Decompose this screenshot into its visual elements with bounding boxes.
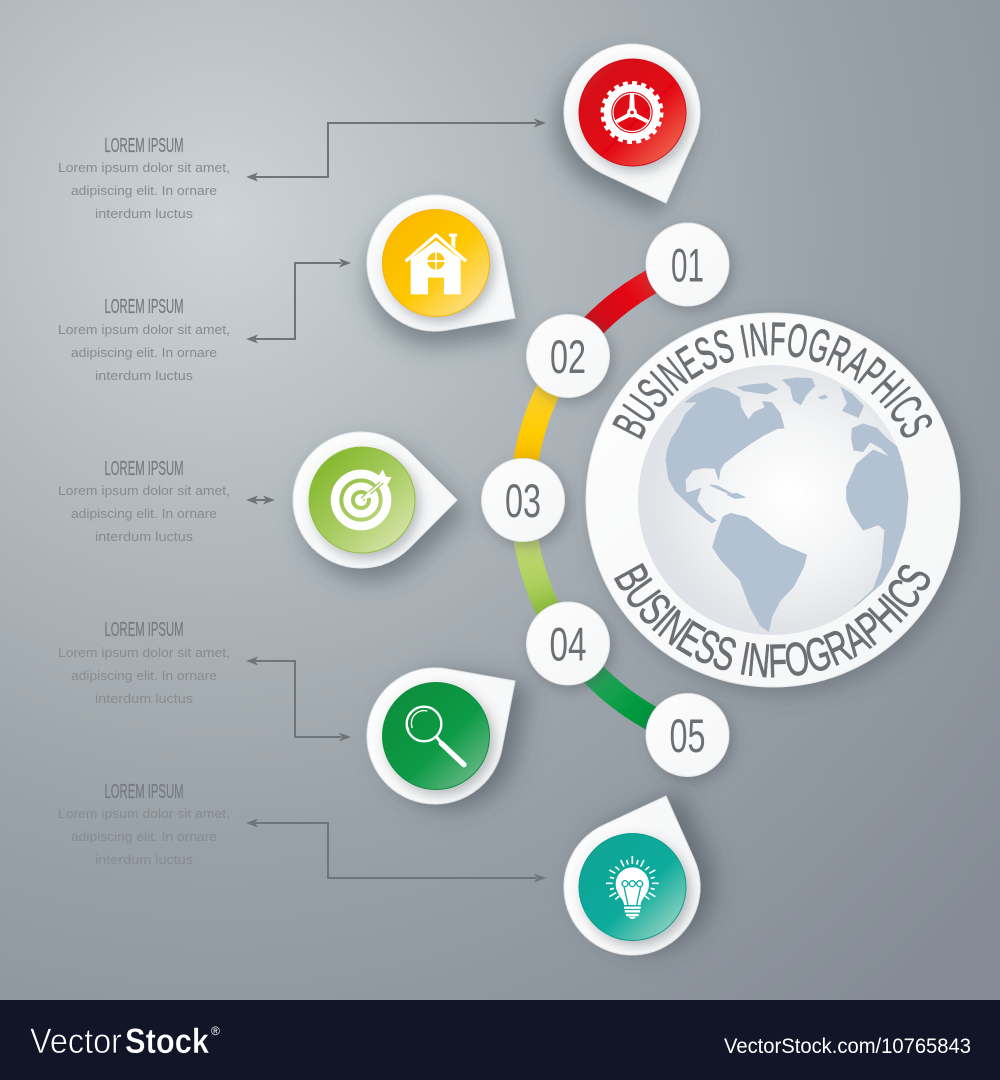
icon: magnifier bbox=[407, 707, 464, 765]
text block 1: LOREM IPSUM bbox=[104, 135, 184, 157]
number badge 03: 03 bbox=[505, 474, 541, 527]
text block 2: interdum luctus bbox=[95, 369, 193, 383]
text block 5: adipiscing elit. In ornare bbox=[71, 830, 217, 844]
text block 5 bbox=[58, 781, 230, 867]
footer logo: Stock bbox=[125, 1022, 209, 1061]
arrow 2 bbox=[246, 258, 351, 344]
outer white ring bbox=[586, 313, 960, 687]
number badge 05 bbox=[646, 694, 729, 776]
text block 1: Lorem ipsum dolor sit amet, bbox=[58, 161, 230, 175]
text block 2: Lorem ipsum dolor sit amet, bbox=[58, 323, 230, 337]
icon: house bbox=[407, 234, 465, 294]
footer logo: Vector bbox=[30, 1022, 122, 1061]
arrow 4 bbox=[246, 656, 351, 742]
text block 3: interdum luctus bbox=[95, 530, 193, 544]
number badge 05: 05 bbox=[670, 709, 706, 762]
text block 3 bbox=[58, 458, 230, 544]
text block 1: interdum luctus bbox=[95, 207, 193, 221]
icon: light bulb bbox=[606, 856, 659, 919]
text block 4: adipiscing elit. In ornare bbox=[71, 669, 217, 683]
footer logo bbox=[30, 1022, 220, 1061]
continents bbox=[666, 378, 908, 631]
number badge 02: 02 bbox=[550, 330, 586, 383]
curved timeline arc bbox=[523, 265, 687, 735]
text block 5: Lorem ipsum dolor sit amet, bbox=[58, 807, 230, 821]
curved title bottom: BUSINESS INFOGRAPHICS bbox=[614, 562, 930, 678]
number badge 02 bbox=[526, 314, 610, 398]
number badge 04: 04 bbox=[550, 618, 586, 670]
text block 1 bbox=[58, 135, 230, 221]
arrow 3 bbox=[246, 496, 275, 504]
text block 2: adipiscing elit. In ornare bbox=[71, 346, 217, 360]
text block 4: interdum luctus bbox=[95, 692, 193, 706]
text block 1: adipiscing elit. In ornare bbox=[71, 184, 217, 198]
text block 4: Lorem ipsum dolor sit amet, bbox=[58, 646, 230, 660]
text block 3: LOREM IPSUM bbox=[104, 458, 184, 480]
globe disc bbox=[638, 365, 908, 635]
pin 3: target bbox=[293, 432, 457, 568]
icon: target with arrow bbox=[335, 469, 392, 526]
pin 2: house bbox=[340, 168, 553, 374]
text block 4 bbox=[58, 619, 230, 706]
text block 2 bbox=[58, 296, 230, 383]
arrow 1 bbox=[246, 118, 546, 182]
text block 4: LOREM IPSUM bbox=[104, 619, 184, 641]
number badge 03 bbox=[482, 458, 564, 542]
arrow 5 bbox=[246, 818, 546, 882]
text block 3: adipiscing elit. In ornare bbox=[71, 507, 217, 521]
text block 2: LOREM IPSUM bbox=[104, 296, 184, 318]
text block 5: interdum luctus bbox=[95, 853, 193, 867]
number badge 04 bbox=[526, 602, 610, 685]
footer logo: ® bbox=[211, 1024, 220, 1038]
text block 3: Lorem ipsum dolor sit amet, bbox=[58, 484, 230, 498]
pin 1: gear bbox=[545, 25, 730, 227]
footer band bbox=[0, 1000, 1000, 1080]
icon: gear bbox=[603, 84, 661, 142]
central globe badge bbox=[584, 312, 974, 701]
curved title top: BUSINESS INFOGRAPHICS bbox=[612, 322, 932, 440]
number badge 01: 01 bbox=[671, 238, 704, 292]
number badge 01 bbox=[646, 223, 729, 306]
pin 5: light bulb bbox=[545, 772, 730, 974]
pin 4: magnifier bbox=[340, 625, 553, 831]
footer image id: VectorStock.com/10765843 bbox=[724, 1035, 971, 1058]
text block 5: LOREM IPSUM bbox=[104, 781, 184, 803]
